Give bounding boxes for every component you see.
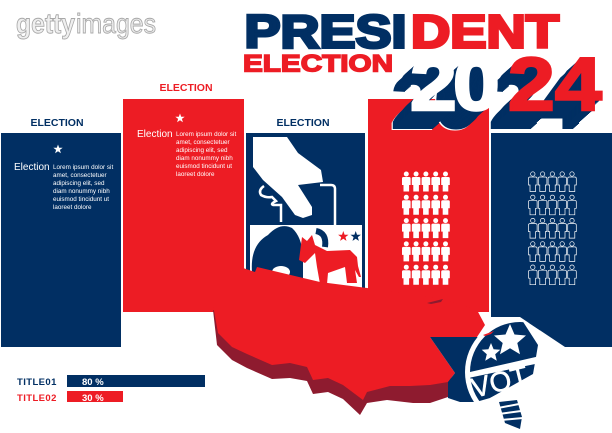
text: lorem panel 1: amet, consectetuer <box>53 172 107 179</box>
badge: white peel <box>480 317 612 433</box>
watermark logo: images <box>76 8 156 39</box>
pictogram: filled people <box>402 172 450 285</box>
text: lorem panel 2: amet, consectetuer <box>176 139 230 146</box>
text: lorem panel 1: euismod tincidunt ut <box>53 196 109 203</box>
panel: red column 2 <box>123 99 244 312</box>
badge: navy lower band <box>470 364 535 401</box>
badge: striped fragment <box>498 400 523 429</box>
icon: star panel 2 <box>175 114 185 122</box>
year: 2024 <box>392 42 603 130</box>
elephant trunk <box>316 231 325 247</box>
fingers <box>260 186 281 222</box>
map: 3D extrusion <box>213 310 455 415</box>
icon: hand with ballot <box>253 137 323 218</box>
icon: red star <box>338 231 348 241</box>
map: lake detail <box>427 299 443 304</box>
icon: elephant <box>252 226 303 285</box>
icon: star panel 1 <box>53 144 63 153</box>
bar label: TITLE02: TITLE02 <box>17 393 57 404</box>
icon: large star <box>494 324 526 354</box>
bar: 30 percent: 30 % <box>82 393 104 404</box>
text: lorem panel 2: euismod tincidunt ut <box>176 163 232 170</box>
text: lorem panel 1: Lorem ipsum dolor sit <box>53 164 113 171</box>
badge: red accent <box>483 331 494 336</box>
text: lorem panel 2: adipiscing elit, sed <box>176 147 227 154</box>
label: Election panel 1: Election <box>14 162 50 173</box>
digit 0 white: 0 <box>453 42 500 126</box>
ballot box <box>250 225 362 290</box>
text: lorem panel 2: laoreet dolore <box>176 171 215 178</box>
elephant leg gap <box>272 266 290 278</box>
badge: navy shadow <box>430 337 480 402</box>
bar: 80 percent: 80 % <box>82 377 104 388</box>
bar label: TITLE01: TITLE01 <box>17 377 57 388</box>
bar: 30 percent <box>67 391 123 404</box>
text: lorem panel 1: laoreet dolore <box>53 204 92 211</box>
heading: panel 1: ELECTION <box>30 117 84 129</box>
text: lorem panel 2 <box>176 131 236 178</box>
heading: panel 2: ELECTION <box>159 82 213 94</box>
title: PRESIDENT <box>244 6 559 58</box>
heading: panel 3: ELECTION <box>276 117 330 129</box>
text: lorem panel 1: diam nonummy nibh <box>53 188 110 195</box>
badge: VOTE text: VOT <box>468 360 531 404</box>
watermark logo <box>16 8 156 39</box>
map: United States <box>213 267 485 400</box>
icon: navy star <box>350 231 361 241</box>
text: lorem panel 1: adipiscing elit, sed <box>53 180 104 187</box>
panel: voting illustration <box>246 133 365 293</box>
label: Election panel 2: Election <box>137 129 173 140</box>
text: lorem panel 2: Lorem ipsum dolor sit <box>176 131 236 138</box>
digit 2 red: 2 <box>508 42 555 126</box>
text: lorem panel 2: diam nonummy nibh <box>176 155 233 162</box>
panel: navy column 1 <box>1 133 121 347</box>
badge: navy cap <box>470 322 540 372</box>
pictogram: outlined people <box>528 172 576 285</box>
panel: navy column 5 <box>491 133 612 347</box>
watermark logo: getty <box>16 8 75 39</box>
badge: vote button <box>465 317 565 402</box>
digit 4: 4 <box>555 42 602 126</box>
panel: red column 4 <box>368 99 489 312</box>
icon: small star <box>482 343 500 361</box>
panel: navy column 5 corner <box>520 317 612 347</box>
bar: 80 percent <box>67 375 205 388</box>
icon: donkey <box>299 235 361 284</box>
title: PRESIDENT: DENT <box>411 6 559 58</box>
subtitle: ELECTION: ELECTION <box>243 50 393 78</box>
title: PRESIDENT: PRESI <box>244 6 406 58</box>
digit 2 white: 2 <box>410 42 457 126</box>
text: lorem panel 1 <box>53 164 114 211</box>
box slot outline <box>320 185 335 225</box>
